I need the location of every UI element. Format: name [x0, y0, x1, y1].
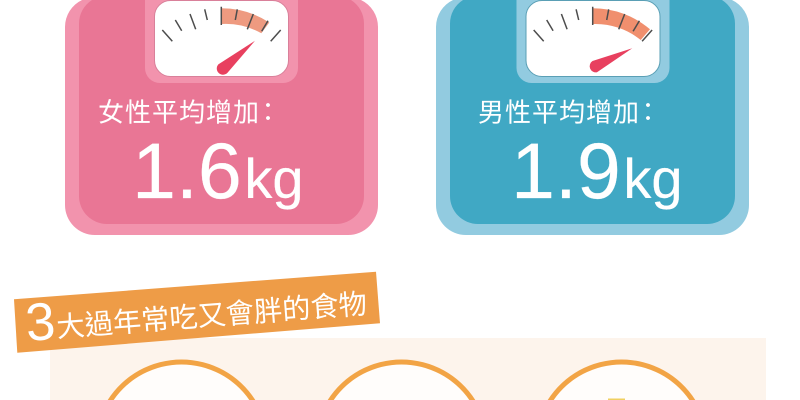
heading text: 3: [23, 292, 57, 353]
label: women's average gain: ：: [255, 98, 282, 128]
panel: food section background: [50, 338, 766, 400]
panel: women's bathroom scale: [65, 0, 378, 235]
banner: section heading: [14, 268, 380, 353]
label: men's average gain: ：: [635, 98, 662, 128]
panel: men's bathroom scale: [436, 0, 749, 235]
label: men's average gain: 男性平均增加: [478, 98, 640, 128]
label: women's average gain: 女性平均增加: [98, 98, 260, 128]
icon: food circle 2: [328, 360, 475, 400]
gauge: women's scale dial: [145, 0, 298, 83]
gauge: men's scale dial: [516, 0, 670, 83]
icon: food circle 3: [548, 360, 695, 400]
value: 1.6 kg: 1.6kg: [132, 126, 303, 215]
value: 1.9 kg: 1.9kg: [511, 126, 682, 215]
icon: food circle 1: [108, 360, 255, 400]
heading text: 大過年常吃又會胖的食物: [55, 287, 368, 343]
